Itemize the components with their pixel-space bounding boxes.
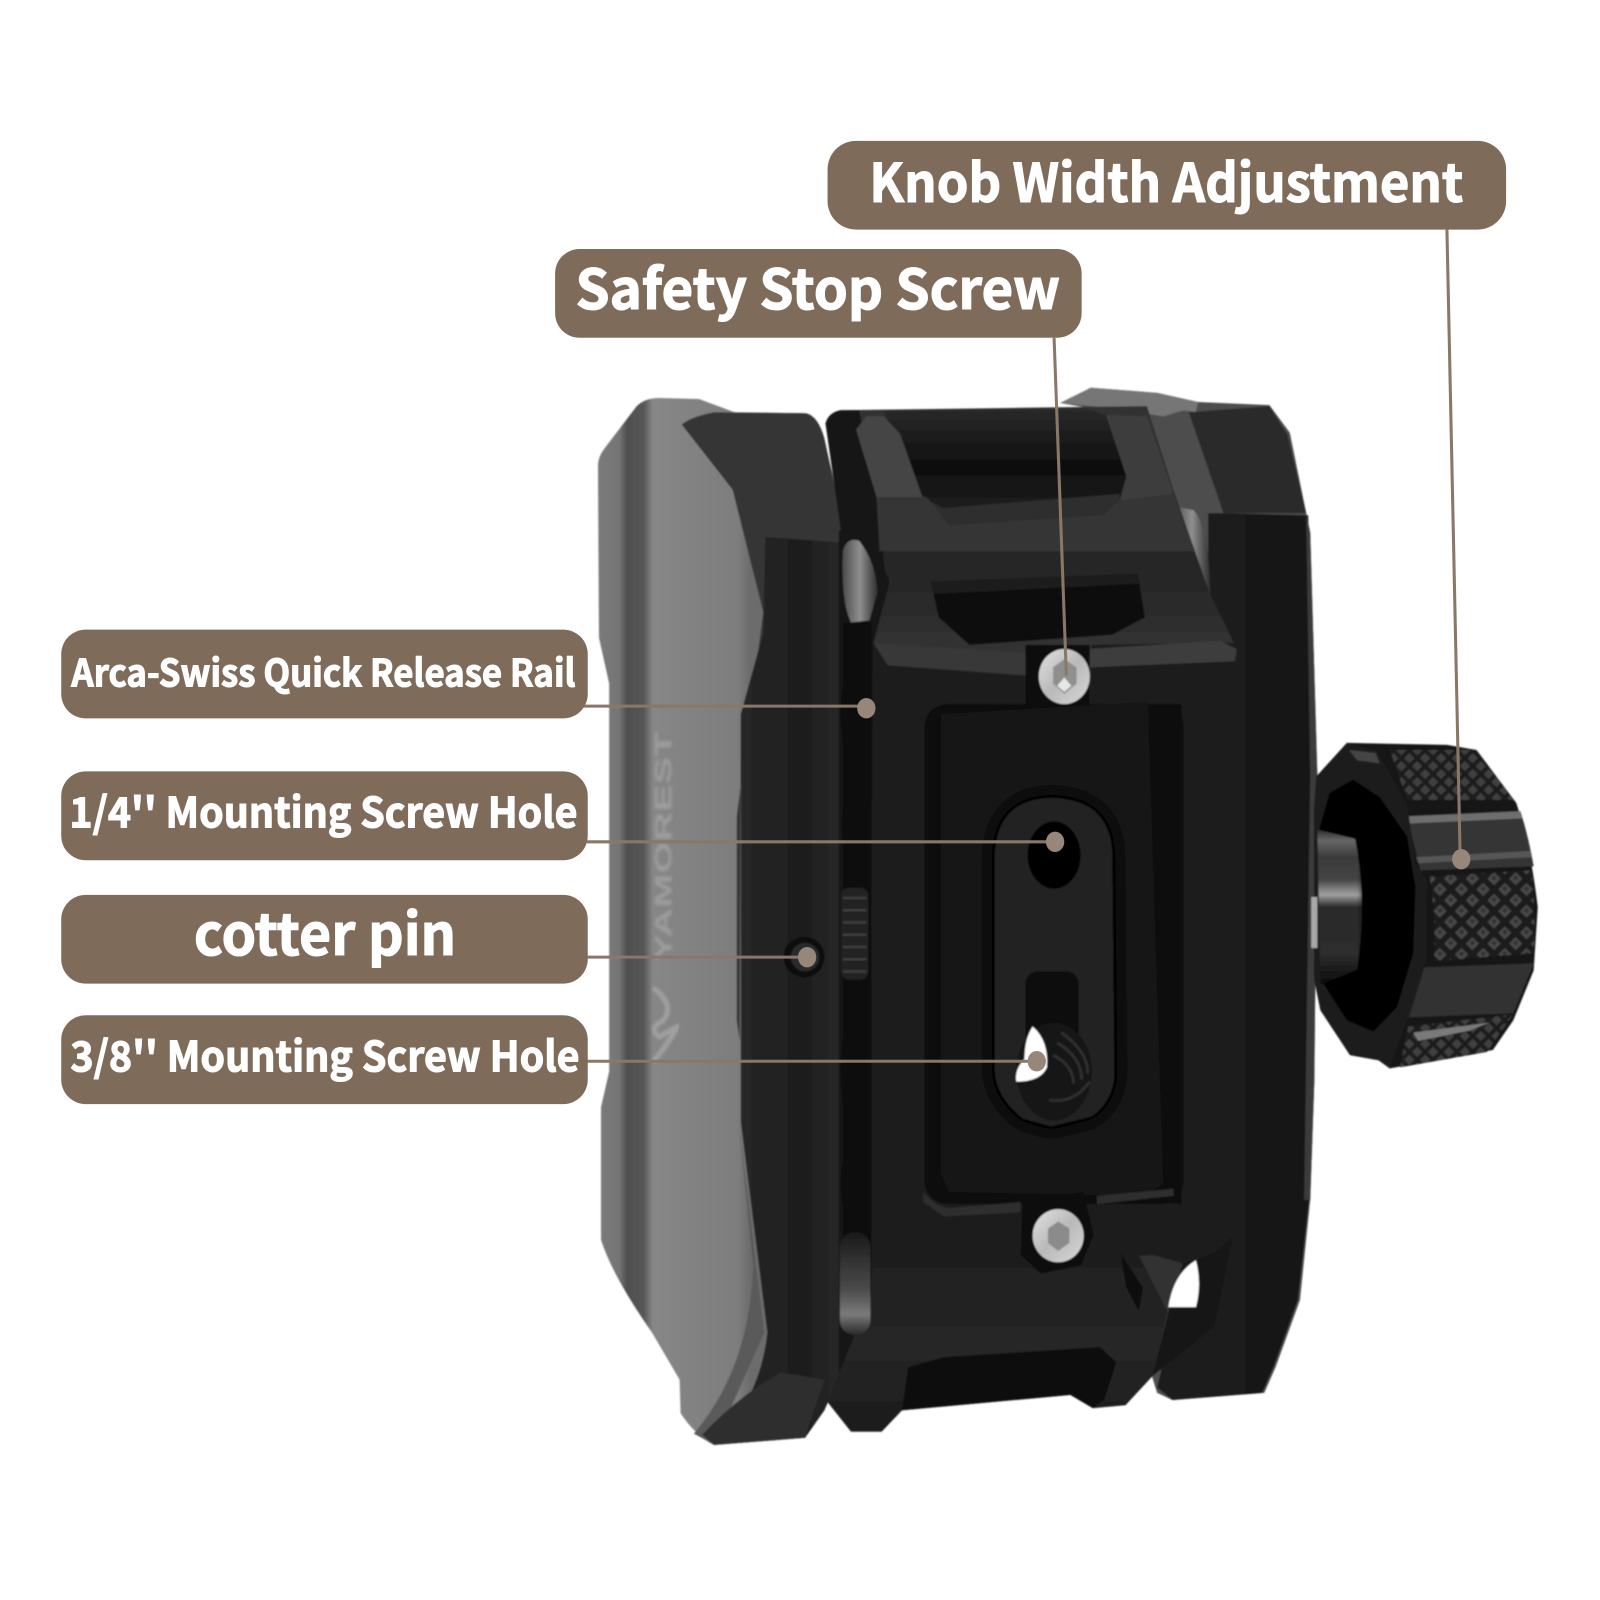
product photo: quick release clamp <box>598 388 1538 1445</box>
callout: Arca-Swiss Quick Release Rail <box>61 630 588 718</box>
leader line: safety stop screw <box>1054 338 1066 676</box>
slot <box>1026 971 1079 1063</box>
1/4 inch hole <box>1028 821 1081 889</box>
callout: Safety Stop Screw: Safety Stop Screw <box>576 245 1060 325</box>
callout: cotter pin <box>61 890 588 984</box>
lower yoke <box>828 1253 1167 1432</box>
white see-through gap <box>1016 1027 1047 1082</box>
main plate <box>869 643 1237 1265</box>
adjustment knob <box>1311 743 1538 1068</box>
knurl main <box>1430 870 1534 961</box>
right upright <box>1106 415 1173 502</box>
leader line: knob width adjustment <box>1447 230 1470 869</box>
cotter pin hole <box>784 937 824 978</box>
leader line: quarter inch hole <box>587 832 1064 852</box>
knob inner cavity <box>1318 780 1415 1032</box>
knob stem <box>1317 830 1362 985</box>
lower window <box>931 573 1145 645</box>
slotted centre plate with mounting holes <box>995 798 1114 1127</box>
left upright <box>856 416 943 520</box>
right pin <box>1173 506 1210 604</box>
side channel holes and pins <box>840 540 878 1335</box>
callout: 1/4 inch Mounting Screw Hole <box>61 771 588 860</box>
middle channel backing <box>839 531 890 1398</box>
right jaw <box>1060 388 1317 1400</box>
knurl top <box>1390 750 1513 800</box>
upper window <box>884 408 1127 515</box>
callout: cotter pin: cotter pin <box>194 890 456 972</box>
knurl bottom <box>1400 1014 1513 1067</box>
callout: 1/4 inch Mounting Screw Hole: 1/4'' Mounting Screw Hole <box>69 780 578 841</box>
leader line: cotter pin <box>587 947 816 967</box>
bottom screw <box>1020 1192 1094 1273</box>
left jaw with grey side plate <box>598 398 849 1445</box>
callout: 3/8 inch Mounting Screw Hole: 3/8'' Mounting Screw Hole <box>70 1023 580 1084</box>
groove lower <box>1408 963 1534 1017</box>
top screw <box>1026 645 1090 704</box>
brand mark engraved on plate: YAMOREST <box>650 732 677 961</box>
centre yoke with windows <box>826 406 1237 1432</box>
knob body <box>1314 743 1538 1068</box>
groove <box>1407 811 1534 870</box>
callout: Arca-Swiss Quick Release Rail: Arca-Swiss Quick Release Rail <box>71 643 576 698</box>
leader line: arca rail <box>582 698 876 718</box>
brand logo <box>653 988 678 1061</box>
callout: 3/8 inch Mounting Screw Hole <box>61 1015 588 1104</box>
recessed plate <box>923 702 1184 1216</box>
callout: Knob Width Adjustment: Knob Width Adjustment <box>869 141 1463 218</box>
3/8 inch threaded hole <box>1016 1022 1092 1120</box>
leader line: three-eighths inch hole <box>587 1051 1046 1071</box>
white gap <box>1168 1260 1199 1307</box>
knob face ring <box>1314 743 1427 1068</box>
